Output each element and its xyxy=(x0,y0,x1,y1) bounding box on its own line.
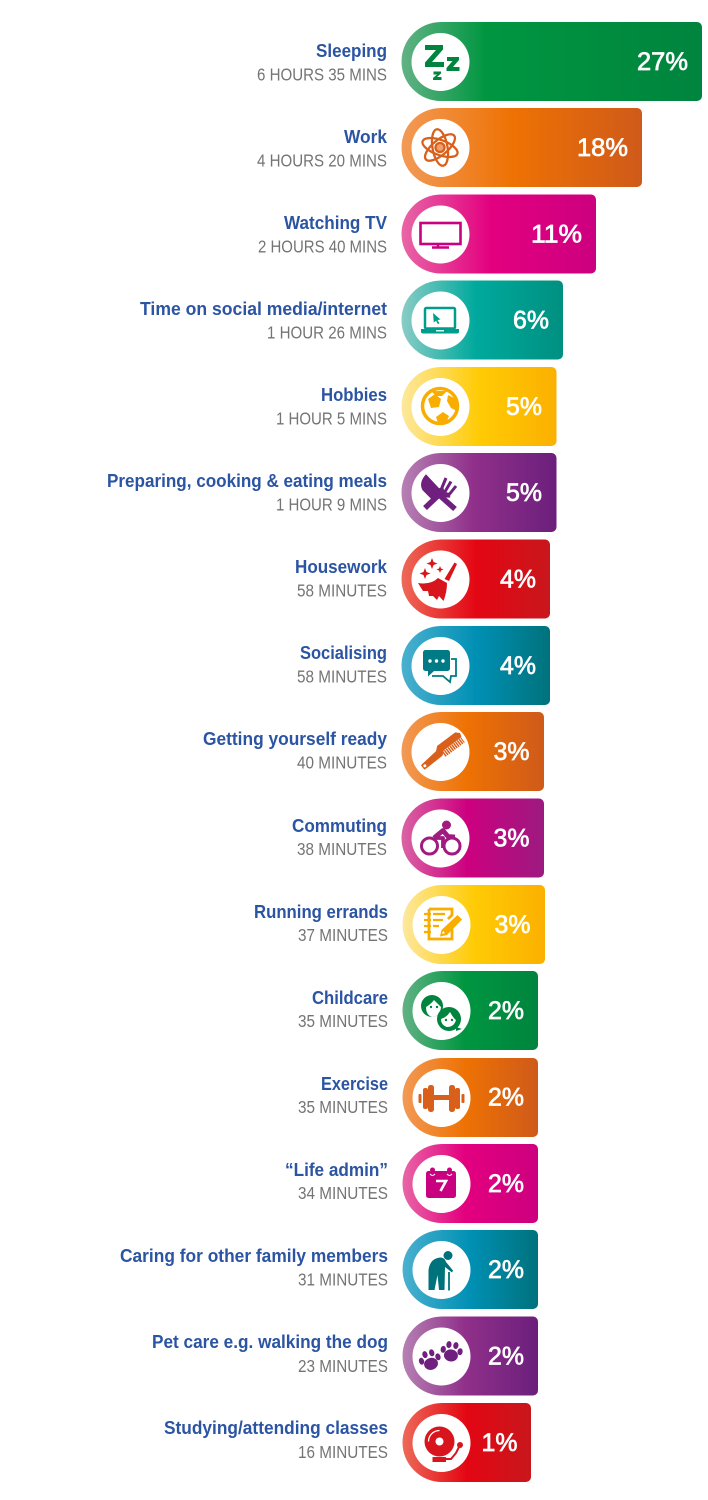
row: Childcare xyxy=(298,971,538,1050)
icon: school bell xyxy=(412,1414,470,1472)
percentage: 5% xyxy=(506,393,542,421)
bar xyxy=(402,453,556,532)
icon: elderly person with cane xyxy=(412,1241,470,1299)
icon: broom and sparkles xyxy=(412,550,470,608)
row: Studying/attending classes xyxy=(164,1403,531,1482)
duration: 58 MINUTES xyxy=(297,667,387,687)
bar xyxy=(402,971,538,1050)
bar xyxy=(402,1403,531,1482)
label: “Life admin” xyxy=(285,1159,388,1180)
duration: 16 MINUTES xyxy=(298,1442,388,1462)
bar xyxy=(403,1230,538,1309)
row: Exercise xyxy=(298,1058,538,1137)
label: Studying/attending classes xyxy=(164,1417,388,1438)
row: Running errands xyxy=(254,885,545,964)
bar xyxy=(402,1316,538,1396)
row: Caring for other family members xyxy=(120,1230,538,1309)
row: Housework xyxy=(295,540,550,618)
row: Getting yourself ready xyxy=(203,712,544,791)
icon: children xyxy=(412,982,470,1040)
icon: dumbbell xyxy=(412,1069,470,1127)
label: Watching TV xyxy=(284,212,388,233)
label: Caring for other family members xyxy=(120,1245,388,1266)
icon: calendar xyxy=(412,1155,470,1213)
icon: sleeping Zzz xyxy=(412,33,470,91)
bar xyxy=(402,712,544,791)
bar xyxy=(402,885,545,964)
duration: 38 MINUTES xyxy=(297,839,387,859)
label: Housework xyxy=(295,556,388,577)
icon: checklist and pencil xyxy=(412,896,470,954)
duration: 1 HOUR 26 MINS xyxy=(267,323,387,343)
label: Sleeping xyxy=(316,40,387,61)
label: Exercise xyxy=(321,1073,388,1094)
label: Work xyxy=(344,126,388,147)
label: Pet care e.g. walking the dog xyxy=(152,1331,388,1352)
row: Pet care e.g. walking the dog xyxy=(152,1316,538,1396)
label: Commuting xyxy=(292,815,387,836)
row: Time on social media/internet xyxy=(140,280,563,360)
percentage: 4% xyxy=(500,566,536,594)
percentage: 2% xyxy=(488,1342,524,1370)
icon: television xyxy=(412,206,470,264)
duration: 40 MINUTES xyxy=(297,753,387,773)
row: Preparing, cooking & eating meals xyxy=(107,453,556,532)
bar xyxy=(402,108,642,187)
bar xyxy=(402,280,563,360)
icon: knife and fork xyxy=(412,464,470,522)
bar xyxy=(402,194,596,274)
label: Socialising xyxy=(300,642,387,663)
percentage: 18% xyxy=(577,134,628,162)
duration: 2 HOURS 40 MINS xyxy=(258,237,387,257)
icon: cyclist xyxy=(412,810,470,868)
icon: speech bubbles xyxy=(412,637,470,695)
duration: 34 MINUTES xyxy=(298,1183,388,1203)
percentage: 6% xyxy=(513,306,549,334)
duration: 4 HOURS 20 MINS xyxy=(257,151,387,171)
percentage: 2% xyxy=(488,997,524,1025)
icon: laptop xyxy=(412,292,470,350)
label: Preparing, cooking & eating meals xyxy=(107,470,387,491)
row: Watching TV xyxy=(258,194,596,274)
row: Socialising xyxy=(297,626,550,705)
bar xyxy=(402,22,702,101)
duration: 37 MINUTES xyxy=(298,925,388,945)
label: Running errands xyxy=(254,901,388,922)
duration: 58 MINUTES xyxy=(297,581,387,601)
percentage: 3% xyxy=(494,738,530,766)
label: Childcare xyxy=(312,987,388,1008)
bar xyxy=(402,626,550,705)
duration: 35 MINUTES xyxy=(298,1097,388,1117)
bar xyxy=(402,1144,538,1223)
label: Getting yourself ready xyxy=(203,728,388,749)
row: Work xyxy=(257,108,642,187)
bar xyxy=(402,1058,538,1137)
percentage: 2% xyxy=(488,1256,524,1284)
percentage: 5% xyxy=(506,479,542,507)
bar xyxy=(402,540,550,618)
percentage: 2% xyxy=(488,1170,524,1198)
percentage: 27% xyxy=(637,48,688,76)
row: "Life admin" xyxy=(285,1144,538,1223)
row: Commuting xyxy=(292,798,544,878)
percentage: 1% xyxy=(482,1429,518,1457)
percentage: 3% xyxy=(494,824,530,852)
icon: comb xyxy=(412,723,470,781)
label: Time on social media/internet xyxy=(140,298,387,319)
row: Sleeping xyxy=(257,22,702,101)
percentage: 11% xyxy=(531,220,582,248)
row: Hobbies xyxy=(276,367,556,446)
duration: 1 HOUR 9 MINS xyxy=(276,495,387,515)
duration: 6 HOURS 35 MINS xyxy=(257,65,387,85)
icon: football xyxy=(412,378,470,436)
duration: 35 MINUTES xyxy=(298,1011,388,1031)
percentage: 4% xyxy=(500,652,536,680)
percentage: 2% xyxy=(488,1084,524,1112)
label: Hobbies xyxy=(321,384,387,405)
duration: 31 MINUTES xyxy=(298,1270,388,1290)
bar xyxy=(402,798,544,878)
duration: 1 HOUR 5 MINS xyxy=(276,409,387,429)
icon: atom xyxy=(412,119,470,177)
duration: 23 MINUTES xyxy=(298,1356,388,1376)
percentage: 3% xyxy=(494,911,530,939)
bar xyxy=(402,367,556,446)
icon: paw prints xyxy=(412,1328,470,1386)
